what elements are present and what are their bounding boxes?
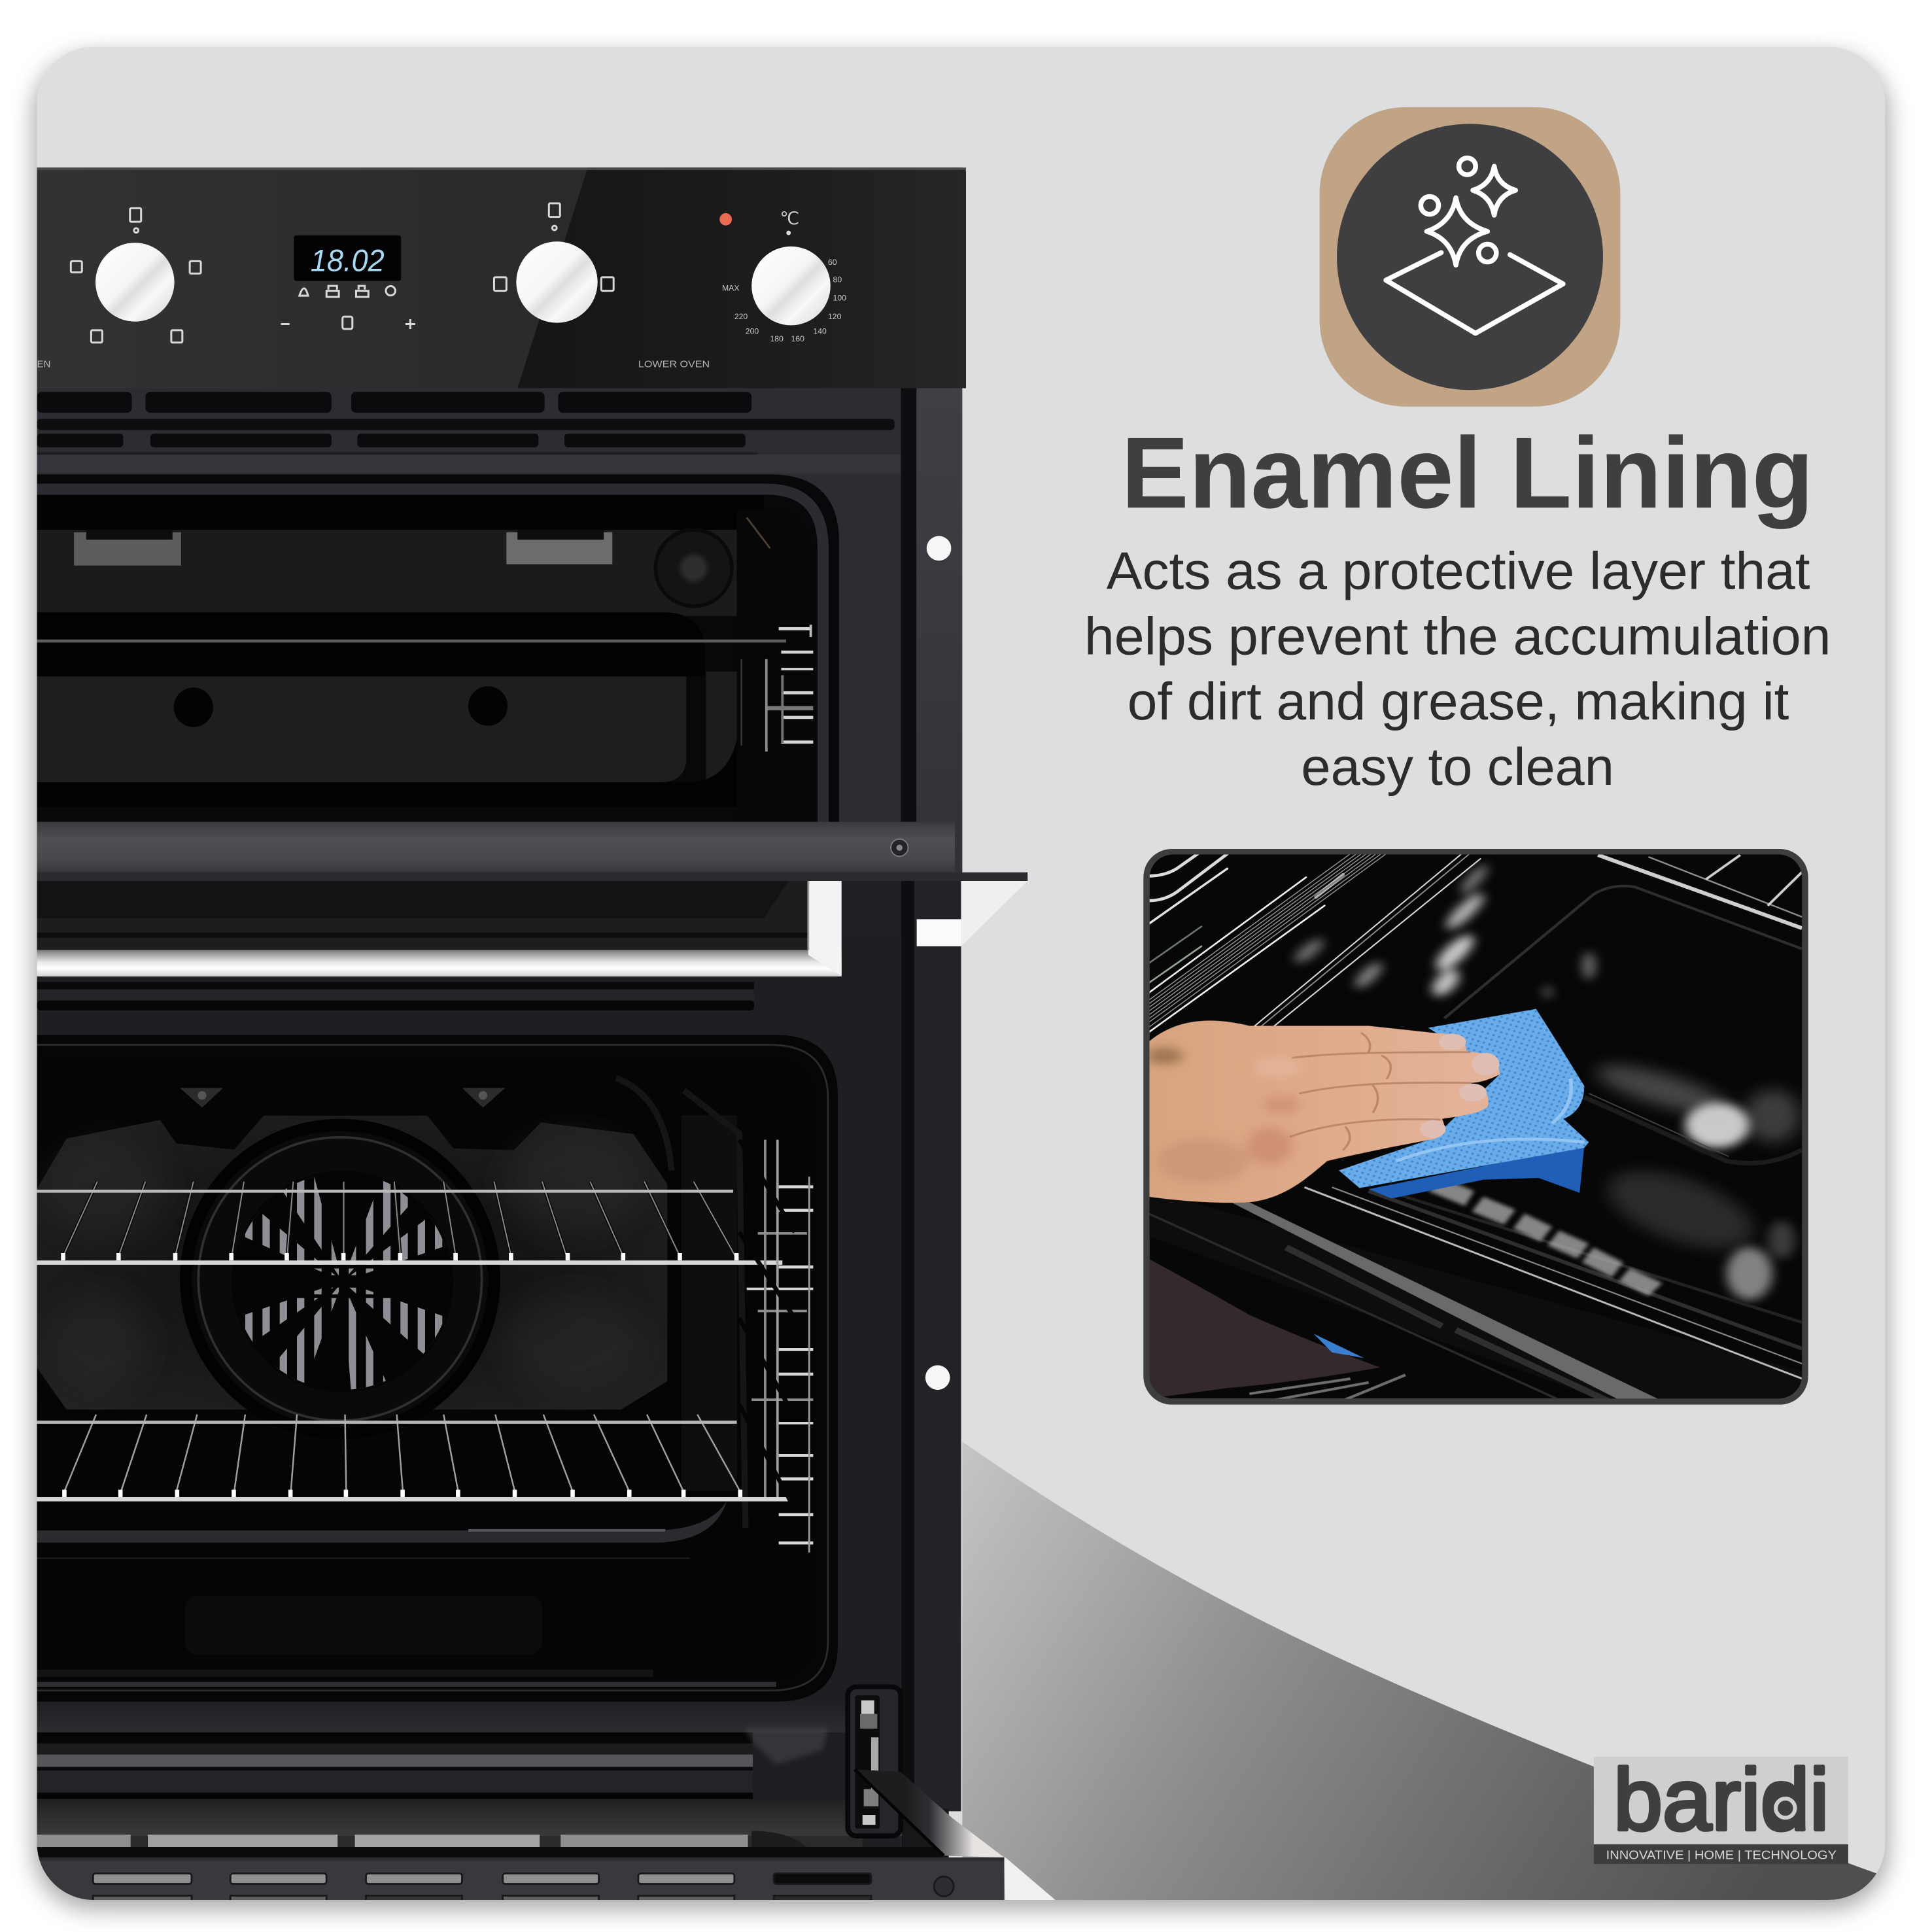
roof clips bbox=[180, 1088, 505, 1108]
control panel bbox=[37, 167, 966, 388]
lower tray panel bbox=[37, 676, 686, 782]
mounting hole lower bbox=[925, 1365, 950, 1390]
indicator light bbox=[719, 213, 732, 226]
under bar recess bbox=[37, 881, 901, 950]
description text: of dirt and grease, making it bbox=[1128, 672, 1789, 731]
lower door frame bbox=[37, 1703, 902, 1733]
cavity floor bbox=[37, 1501, 776, 1687]
temperature scale: MAX bbox=[722, 284, 739, 293]
knob: upper oven function bbox=[95, 243, 175, 322]
rack top right bbox=[1598, 855, 1802, 928]
oven appliance bbox=[37, 167, 1056, 1905]
logo wordmark: baridi bbox=[1613, 1751, 1829, 1849]
description text: Acts as a protective layer that bbox=[1107, 542, 1810, 601]
cloth bbox=[1339, 1009, 1589, 1188]
fingernails bbox=[1420, 1034, 1500, 1138]
logo: baridi bbox=[1594, 1751, 1848, 1864]
hand shading bbox=[1290, 1033, 1470, 1150]
badge circle bbox=[1337, 124, 1603, 390]
wedge reflection bbox=[961, 881, 1027, 946]
back wall bbox=[37, 1116, 667, 1409]
lower oven cavity bbox=[37, 1035, 838, 1702]
door inner reflection bbox=[37, 1800, 942, 1859]
tray holes bbox=[174, 687, 213, 727]
lower wall bands bbox=[1148, 1187, 1802, 1405]
temperature scale: 100 bbox=[833, 294, 846, 303]
temperature scale: 80 bbox=[833, 275, 842, 284]
icon badge bbox=[1320, 107, 1620, 407]
digital display bbox=[294, 235, 401, 281]
top vents bbox=[37, 392, 895, 455]
door screw bbox=[934, 1876, 954, 1896]
temperature scale: 120 bbox=[828, 312, 842, 321]
temperature scale bbox=[722, 209, 846, 343]
reflections bbox=[1290, 862, 1795, 1300]
knob: temperature bbox=[751, 247, 831, 325]
door bar bbox=[37, 822, 1027, 881]
lower wire shelf bbox=[37, 1415, 789, 1502]
cloth shadow bbox=[1369, 1146, 1584, 1199]
temperature scale: ℃ bbox=[780, 209, 799, 228]
enamel wall tubes and fine lines bbox=[1148, 850, 1481, 1033]
door bottom bar bbox=[37, 1857, 1004, 1905]
hand bbox=[1148, 1020, 1500, 1203]
control icons bbox=[71, 203, 613, 343]
oven labels: LOWER OVEN bbox=[638, 358, 710, 370]
grey swoosh bbox=[962, 1441, 1885, 1900]
temperature scale: 200 bbox=[746, 327, 759, 336]
knob: lower oven function bbox=[516, 241, 598, 323]
upper cavity back wall bbox=[37, 530, 737, 616]
control panel: EN bbox=[37, 358, 50, 370]
convection fan bbox=[186, 1125, 494, 1433]
door side bbox=[855, 1769, 1056, 1900]
description text: easy to clean bbox=[1301, 738, 1614, 797]
description text: helps prevent the accumulation bbox=[1084, 607, 1831, 666]
temperature scale: 220 bbox=[734, 312, 748, 321]
description text bbox=[1084, 542, 1831, 797]
hinge bbox=[848, 1687, 901, 1836]
wire shelf bbox=[37, 640, 786, 642]
hand reflection bbox=[1148, 1258, 1380, 1398]
side rack bbox=[739, 1140, 813, 1553]
heading: Enamel Lining bbox=[1121, 416, 1814, 529]
upper side rack bbox=[740, 625, 813, 751]
upper oven cavity bbox=[37, 474, 839, 823]
right cavity corner bbox=[737, 511, 816, 819]
photo: wiping enamel oven interior bbox=[1143, 849, 1808, 1405]
logo tagline bar bbox=[1594, 1844, 1848, 1864]
temperature scale: 180 bbox=[770, 334, 784, 343]
logo panel bbox=[1594, 1757, 1848, 1844]
temperature scale: 60 bbox=[828, 258, 837, 267]
logo tagline: INNOVATIVE | HOME | TECHNOLOGY bbox=[1606, 1848, 1837, 1861]
temperature scale: 140 bbox=[813, 327, 827, 336]
badge background bbox=[1320, 107, 1620, 407]
mounting hole upper bbox=[927, 536, 951, 561]
handle bbox=[37, 881, 842, 976]
upper wire shelf bbox=[37, 1182, 782, 1265]
temperature scale: 160 bbox=[791, 334, 804, 343]
bright lip reflections bbox=[1428, 1178, 1663, 1296]
bar screw bbox=[891, 839, 908, 856]
logo ring bbox=[1767, 1789, 1804, 1827]
mid vents bbox=[37, 982, 754, 1010]
upper cavity fan cover bbox=[655, 530, 732, 606]
lower vents bbox=[37, 1727, 828, 1799]
door white edge bbox=[1004, 1857, 1056, 1900]
icon: sparkling surface bbox=[1386, 158, 1563, 334]
upper brackets bbox=[74, 532, 181, 566]
grill tray bbox=[37, 612, 705, 676]
oven frame bbox=[37, 388, 901, 1900]
digital display: 18.02 bbox=[311, 243, 385, 277]
tray rim line bbox=[1444, 886, 1802, 1018]
